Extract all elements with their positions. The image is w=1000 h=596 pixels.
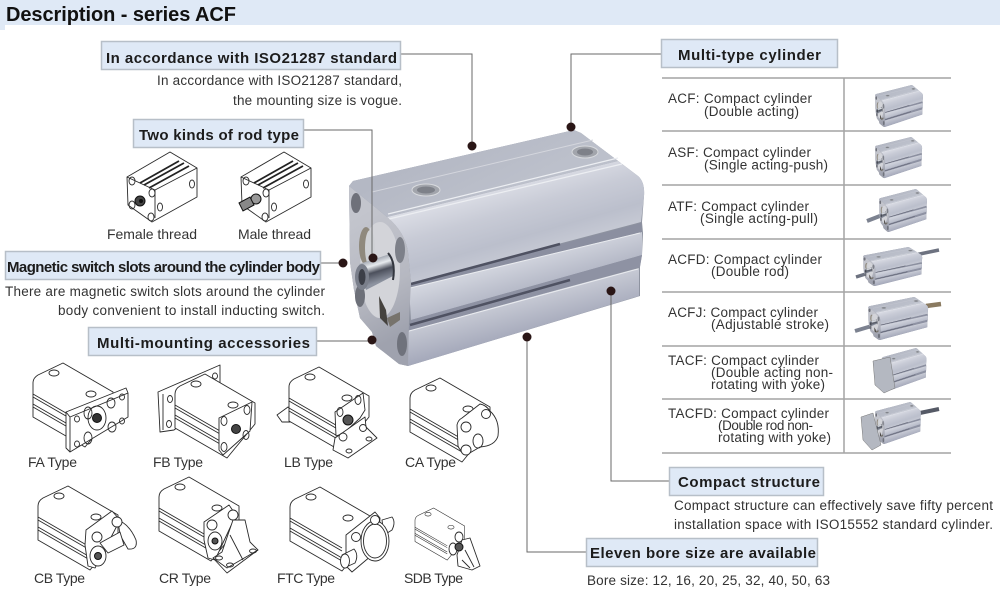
icon: FB type bbox=[153, 365, 255, 470]
callout: ISO21287 standard: In accordance with ISO21287 standard, bbox=[157, 73, 402, 88]
row: ACF: (Double acting) bbox=[704, 104, 799, 119]
table: cylinder types bbox=[662, 78, 951, 453]
callout: eleven bore sizes bbox=[522, 332, 830, 588]
icon: LB type: LB Type bbox=[284, 454, 333, 470]
icon: FA type: FA Type bbox=[28, 454, 77, 470]
icon: CA type bbox=[405, 378, 498, 470]
callout: eleven bore sizes: Eleven bore size are available bbox=[590, 545, 816, 562]
row: TACF bbox=[668, 348, 926, 393]
row: ACFJ: ACFJ: Compact cylinder bbox=[668, 305, 818, 320]
icon: LB type bbox=[277, 367, 377, 470]
row: TACF: rotating with yoke) bbox=[711, 377, 825, 392]
callout: multi-type cylinder bbox=[566, 40, 838, 132]
row: TACFD: TACFD: Compact cylinder bbox=[668, 406, 830, 421]
row: ACFJ bbox=[668, 297, 941, 340]
icon: CB type bbox=[34, 486, 136, 586]
row: ACF: ACF: Compact cylinder bbox=[668, 91, 812, 106]
callout: compact structure: Compact structure can effectively save fifty percent bbox=[674, 498, 993, 513]
icon: CA type: CA Type bbox=[405, 454, 456, 470]
row: TACF: TACF: Compact cylinder bbox=[668, 353, 820, 368]
icon: female thread bbox=[107, 152, 197, 242]
icon: FTC type: FTC Type bbox=[277, 570, 335, 586]
callout: magnetic switch slots: There are magnetic switch slots around the cylinder bbox=[5, 284, 326, 299]
row: TACF: (Double acting non- bbox=[711, 365, 833, 380]
callout: two kinds of rod type bbox=[134, 120, 378, 262]
callout: multi-mounting accessories: Multi-mounting accessories bbox=[97, 335, 310, 352]
row: ASF: (Single acting-push) bbox=[704, 158, 828, 172]
callout: magnetic switch slots: Magnetic switch slots around the cylinder body bbox=[7, 259, 321, 276]
row: ACF bbox=[668, 85, 923, 127]
callout: ISO21287 standard: In accordance with ISO21287 standard bbox=[106, 50, 397, 67]
callout: ISO21287 standard bbox=[102, 42, 476, 150]
callout: eleven bore sizes: Bore size: 12, 16, 20, 25, 32, 40, 50, 63 bbox=[587, 573, 830, 588]
row: ASF: ASF: Compact cylinder bbox=[668, 145, 812, 160]
callout: multi-mounting accessories bbox=[88, 328, 376, 356]
row: ACFD: (Double rod) bbox=[711, 264, 789, 279]
icon: SDB type bbox=[404, 508, 480, 586]
icon: SDB type: SDB Type bbox=[404, 570, 463, 586]
icon: CR type bbox=[159, 477, 258, 586]
row: ASF bbox=[668, 137, 922, 178]
callout: two kinds of rod type: Two kinds of rod type bbox=[139, 127, 299, 144]
icon: CB type: CB Type bbox=[34, 570, 85, 586]
title band bbox=[0, 0, 1000, 30]
row: ACFD: ACFD: Compact cylinder bbox=[668, 252, 822, 267]
callout: ISO21287 standard: the mounting size is vogue. bbox=[233, 93, 402, 108]
icon: CR type: CR Type bbox=[159, 570, 211, 586]
icon: FA type bbox=[28, 363, 128, 470]
row: ACFD bbox=[668, 247, 939, 286]
icon: FB type: FB Type bbox=[153, 454, 203, 470]
icon: male thread: Male thread bbox=[238, 226, 311, 242]
callout: multi-type cylinder: Multi-type cylinder bbox=[678, 47, 821, 64]
main cylinder photo bbox=[349, 130, 644, 366]
row: ATF bbox=[668, 189, 927, 232]
callout: compact structure: Compact structure bbox=[678, 474, 820, 491]
row: ATF: ATF: Compact cylinder bbox=[668, 199, 810, 214]
icon: male thread bbox=[238, 152, 311, 242]
row: TACFD: rotating with yoke) bbox=[718, 430, 831, 445]
callout: compact structure: installation space with ISO15552 standard cylinder. bbox=[674, 517, 993, 532]
title band: Description - series ACF bbox=[6, 4, 236, 26]
callout: compact structure bbox=[606, 286, 993, 532]
callout: magnetic switch slots: body convenient to install inducting switch. bbox=[58, 303, 325, 318]
callout: magnetic switch slots bbox=[5, 252, 348, 318]
row: ACFJ: (Adjustable stroke) bbox=[711, 317, 829, 332]
icon: FTC type bbox=[277, 487, 394, 586]
icon: female thread: Female thread bbox=[107, 226, 197, 242]
row: TACFD: (Double rod non- bbox=[718, 418, 813, 433]
row: ATF: (Single acting-pull) bbox=[700, 211, 818, 226]
row: TACFD bbox=[668, 402, 939, 450]
